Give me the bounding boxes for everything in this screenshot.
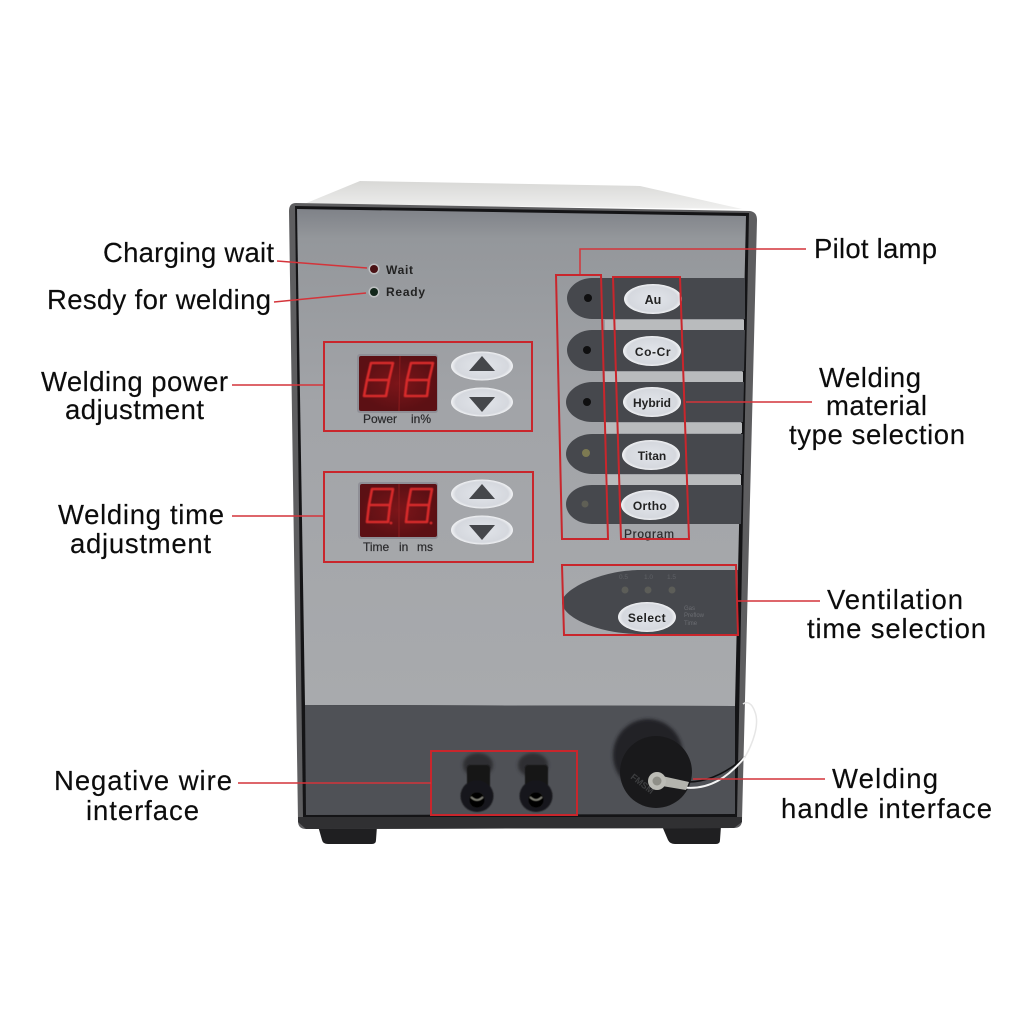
power down button bbox=[451, 388, 513, 416]
label: welding handle interface: handle interface bbox=[781, 793, 992, 824]
label: negative wire interface bbox=[54, 765, 232, 826]
wire bbox=[688, 757, 745, 782]
front panel bbox=[297, 209, 746, 706]
button: Titan bbox=[622, 440, 680, 470]
label: welding material type selection: type selection bbox=[789, 419, 965, 450]
indicator: ready bbox=[368, 285, 425, 299]
top cover bbox=[304, 181, 742, 209]
button: Hybrid bbox=[623, 387, 681, 417]
label: ventilation time selection bbox=[807, 584, 986, 644]
caption: time: in bbox=[399, 540, 408, 554]
machine body bbox=[289, 181, 757, 844]
indicator: ready: Ready bbox=[386, 285, 425, 299]
material bands bbox=[566, 278, 745, 524]
outer case bbox=[289, 203, 757, 829]
caption: power: in% bbox=[411, 412, 431, 426]
label: welding material type selection: material bbox=[826, 390, 927, 421]
lower dark panel bbox=[305, 705, 735, 815]
terminal lug bbox=[662, 776, 689, 790]
callout lines and boxes bbox=[232, 249, 825, 815]
welding handle connector: FMSM bbox=[629, 772, 656, 796]
ventilation band: 1.5 bbox=[667, 574, 676, 581]
time display bbox=[358, 482, 438, 554]
label: welding power adjustment: adjustment bbox=[65, 394, 204, 425]
indicator: wait: Wait bbox=[386, 263, 413, 277]
label: welding time adjustment: Welding time bbox=[58, 499, 224, 530]
label: welding handle interface bbox=[781, 763, 992, 824]
negative wire connectors bbox=[460, 753, 552, 812]
label: welding material type selection: Welding bbox=[819, 362, 921, 393]
button: Ortho bbox=[621, 490, 679, 520]
label: ready for welding: Resdy for welding bbox=[47, 284, 271, 315]
caption: time: ms bbox=[417, 540, 433, 554]
label: negative wire interface: interface bbox=[86, 795, 199, 826]
indicator: wait bbox=[368, 263, 413, 277]
ventilation band: Select bbox=[628, 611, 666, 625]
digits: power bbox=[364, 363, 433, 396]
button: Au bbox=[624, 284, 682, 314]
label: ventilation time selection: time selection bbox=[807, 613, 986, 644]
caption: time: Time bbox=[363, 540, 390, 554]
button: Titan: Titan bbox=[638, 449, 666, 463]
button: Au: Au bbox=[645, 293, 661, 307]
power display bbox=[357, 354, 438, 426]
feet bbox=[318, 826, 721, 844]
button: Co-Cr: Co-Cr bbox=[635, 345, 671, 359]
wire loop bbox=[743, 703, 757, 757]
label: welding handle interface: Welding bbox=[832, 763, 938, 794]
label: pilot lamp: Pilot lamp bbox=[814, 233, 937, 264]
label: ventilation time selection: Ventilation bbox=[827, 584, 963, 615]
label: welding time adjustment: adjustment bbox=[70, 528, 211, 559]
label: welding power adjustment bbox=[41, 366, 228, 425]
button: Hybrid: Hybrid bbox=[633, 396, 671, 410]
program label: Program bbox=[624, 527, 674, 541]
button: Co-Cr bbox=[623, 336, 681, 366]
label: welding material type selection bbox=[789, 362, 965, 450]
ventilation band: Gas bbox=[684, 606, 695, 612]
button: Ortho: Ortho bbox=[633, 499, 667, 513]
label: welding power adjustment: Welding power bbox=[41, 366, 228, 397]
pilot lamps bbox=[582, 294, 592, 508]
power up button bbox=[451, 352, 513, 380]
welding handle connector bbox=[613, 703, 757, 808]
ventilation band: Preflow bbox=[684, 613, 705, 619]
time up button bbox=[451, 480, 513, 508]
ventilation band: Time bbox=[684, 621, 698, 627]
digits: time bbox=[367, 489, 432, 524]
light stripes bbox=[605, 320, 744, 485]
ventilation band: 0.5 bbox=[619, 574, 628, 581]
caption: power: Power bbox=[363, 412, 397, 426]
time down button bbox=[451, 516, 513, 544]
label: charging wait: Charging wait bbox=[103, 237, 274, 268]
ventilation band: 1.0 bbox=[644, 574, 653, 581]
label: negative wire interface: Negative wire bbox=[54, 765, 232, 796]
label: welding time adjustment bbox=[58, 499, 224, 559]
ventilation band bbox=[562, 570, 738, 634]
